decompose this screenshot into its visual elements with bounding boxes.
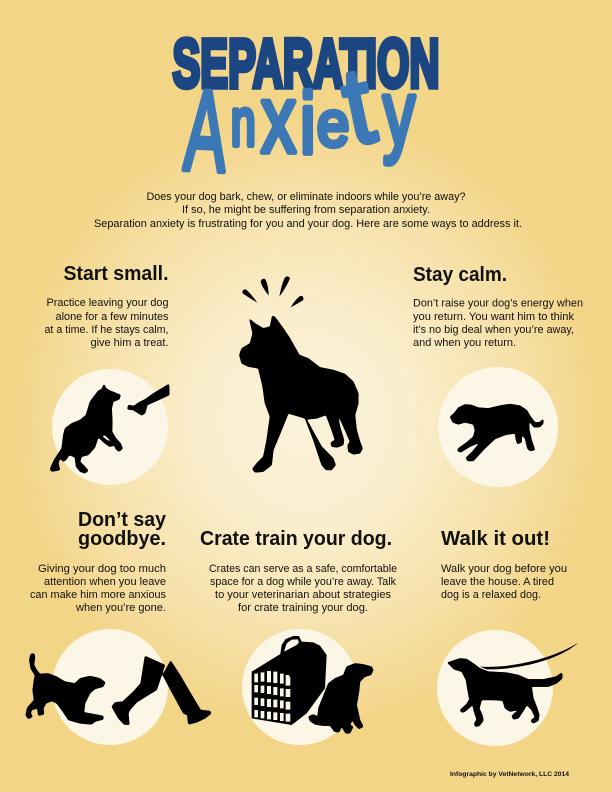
heading: Crate train your dog.	[200, 528, 392, 550]
title: Anxiety: i	[300, 75, 316, 172]
panel: walk it out	[437, 528, 578, 746]
intro text: If so, he might be suffering from separation anxiety.	[182, 204, 430, 216]
heading: Start small.	[64, 263, 168, 285]
title: Anxiety: y	[383, 61, 415, 165]
body text: leave the house. A tired	[441, 576, 554, 588]
body text	[44, 297, 169, 349]
body text: Crates can serve as a safe, comfortable	[209, 563, 397, 575]
body text: to your veterinarian about strategies	[215, 589, 392, 601]
heading: Stay calm.	[413, 264, 507, 286]
body text: alone for a few minutes	[56, 311, 169, 323]
intro text: Does your dog bark, chew, or eliminate indoors while you’re away?	[146, 191, 466, 203]
heading: Don’t say	[78, 509, 167, 531]
body text: Walk your dog before you	[441, 563, 567, 575]
panel: crate train your dog	[200, 528, 397, 745]
title: Anxiety: x	[261, 65, 296, 173]
heading: Walk it out!	[441, 528, 550, 550]
central dog with alert marks	[239, 276, 363, 472]
body text: dog is a relaxed dog.	[441, 589, 541, 601]
body text	[441, 563, 567, 601]
icon: dog jumping at treat	[50, 384, 169, 473]
body text: Giving your dog too much	[38, 563, 166, 575]
circle	[52, 369, 168, 485]
icon: dog on leash	[447, 643, 578, 727]
intro text	[94, 191, 522, 230]
title: Separation: SEPARATION	[172, 25, 440, 102]
icon: leash	[480, 643, 578, 669]
body text: can make him more anxious	[30, 589, 167, 601]
title: Anxiety: e	[317, 88, 349, 160]
circle	[437, 630, 553, 746]
title: Anxiety: t	[333, 44, 384, 168]
body text	[30, 563, 167, 614]
circle	[242, 629, 358, 745]
body text	[413, 298, 583, 349]
body text: it’s no big deal when you’re away,	[413, 324, 574, 336]
title: Anxiety: A	[182, 67, 230, 196]
icon: running dog	[450, 404, 543, 461]
body text: when you’re gone.	[75, 602, 166, 614]
intro text: Separation anxiety is frustrating for you and your dog. Here are some ways to address it.	[94, 218, 522, 230]
icon: alert marks	[242, 276, 303, 307]
body text: at a time. If he stays calm,	[44, 324, 168, 336]
title	[172, 25, 440, 196]
heading: goodbye.	[78, 528, 166, 550]
title: Anxiety	[182, 44, 415, 196]
circle	[438, 367, 558, 487]
body text: you return. You want him to think	[413, 311, 575, 323]
icon: standing dog	[239, 316, 363, 472]
heading	[78, 509, 167, 550]
icon: hand with treat	[127, 384, 169, 415]
credit: Infographic by VetNetwork, LLC 2014	[450, 771, 569, 778]
body text: Don’t raise your dog’s energy when	[413, 298, 583, 310]
body text: space for a dog while you’re away. Talk	[210, 576, 397, 588]
circle	[52, 629, 168, 745]
body text: attention when you leave	[44, 576, 166, 588]
title: Anxiety: n	[231, 85, 255, 159]
body text: give him a treat.	[90, 337, 168, 349]
icon: dog and walking legs	[26, 653, 211, 725]
body text: and when you return.	[413, 337, 516, 349]
body text	[209, 563, 397, 614]
panel: don't say goodbye	[26, 509, 211, 745]
body text: for crate training your dog.	[238, 602, 368, 614]
panel: start small	[44, 263, 169, 485]
panel: stay calm	[413, 264, 583, 487]
body text: Practice leaving your dog	[46, 297, 168, 309]
icon: crate and sitting dog	[252, 636, 373, 733]
